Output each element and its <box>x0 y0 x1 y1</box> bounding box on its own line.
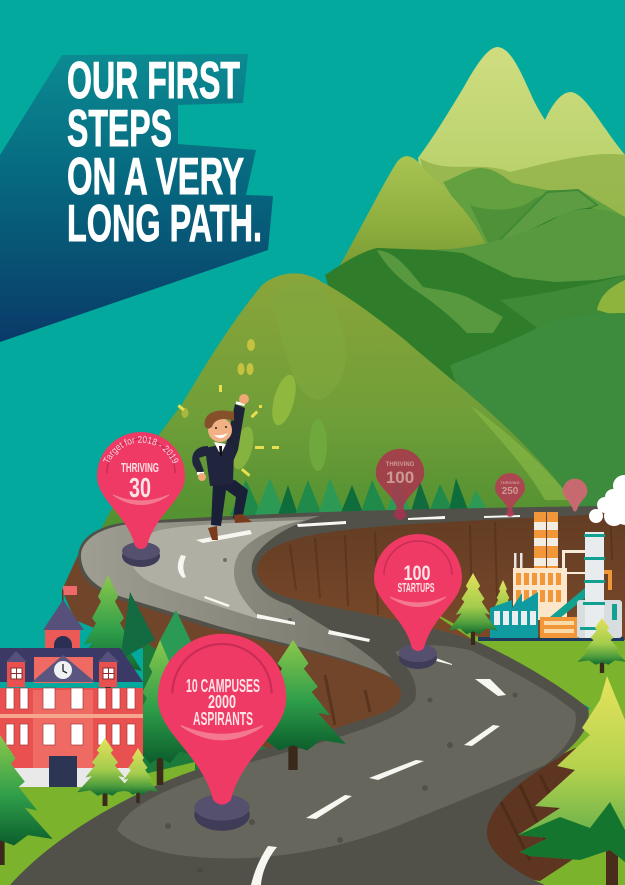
pin: thriving 30 <box>97 432 185 567</box>
university building <box>0 586 143 787</box>
distant milestone pin: 250: 250 <box>502 486 519 497</box>
tree behind factory <box>489 580 517 630</box>
distant milestone pin: 250: THRIVING <box>500 480 520 485</box>
distant milestone pin: faded <box>563 479 587 511</box>
big pine tree bottom right <box>518 676 625 885</box>
pin: 10 campuses 2000 aspirants: 2000 <box>208 692 236 712</box>
foreground trees <box>0 735 158 865</box>
forest floor behind pin <box>143 640 285 782</box>
title ribbon <box>0 54 273 342</box>
right green land <box>420 605 625 885</box>
businessman <box>192 394 252 540</box>
title: OUR FIRST <box>67 52 240 110</box>
distant milestone pin: thriving 100: THRIVING <box>386 462 415 468</box>
distant milestone pin: 250 <box>495 473 525 517</box>
pin: 10 campuses 2000 aspirants: 10 CAMPUSES <box>186 676 260 696</box>
distant milestone pin: thriving 100: 100 <box>386 468 414 487</box>
title: STEPS <box>67 100 172 158</box>
factory <box>478 512 624 641</box>
pin: 100 startups <box>374 534 462 669</box>
right cliff <box>232 488 625 645</box>
pin: thriving 30: THRIVING <box>121 460 159 475</box>
dark green ranges <box>325 208 625 520</box>
pin: 10 campuses 2000 aspirants <box>158 634 286 831</box>
title <box>67 52 262 253</box>
action sparks <box>177 385 279 477</box>
left green land <box>0 762 195 885</box>
left cliff <box>62 555 422 755</box>
mid green peak <box>340 156 487 265</box>
bottom right cliff <box>486 748 625 881</box>
front big hill <box>97 273 572 537</box>
cliff stripes <box>290 500 612 615</box>
road dashes <box>178 515 520 885</box>
forest strip behind road <box>230 478 490 515</box>
background trees left <box>74 575 346 785</box>
pin: thriving 30: Target for 2018 - 2019 <box>102 436 178 464</box>
title: ON A VERY <box>67 148 244 206</box>
pin: 100 startups: STARTUPS <box>398 580 435 595</box>
trees by factory <box>449 573 625 673</box>
pin: 10 campuses 2000 aspirants: ASPIRANTS <box>193 709 253 729</box>
road <box>10 506 600 885</box>
title: LONG PATH. <box>67 195 262 253</box>
pin: 100 startups: 100 <box>404 562 430 585</box>
pin: thriving 30: 30 <box>129 472 151 503</box>
distant milestone pin: thriving 100 <box>376 449 424 520</box>
back mountains <box>418 47 625 260</box>
smoke cloud <box>589 475 625 526</box>
